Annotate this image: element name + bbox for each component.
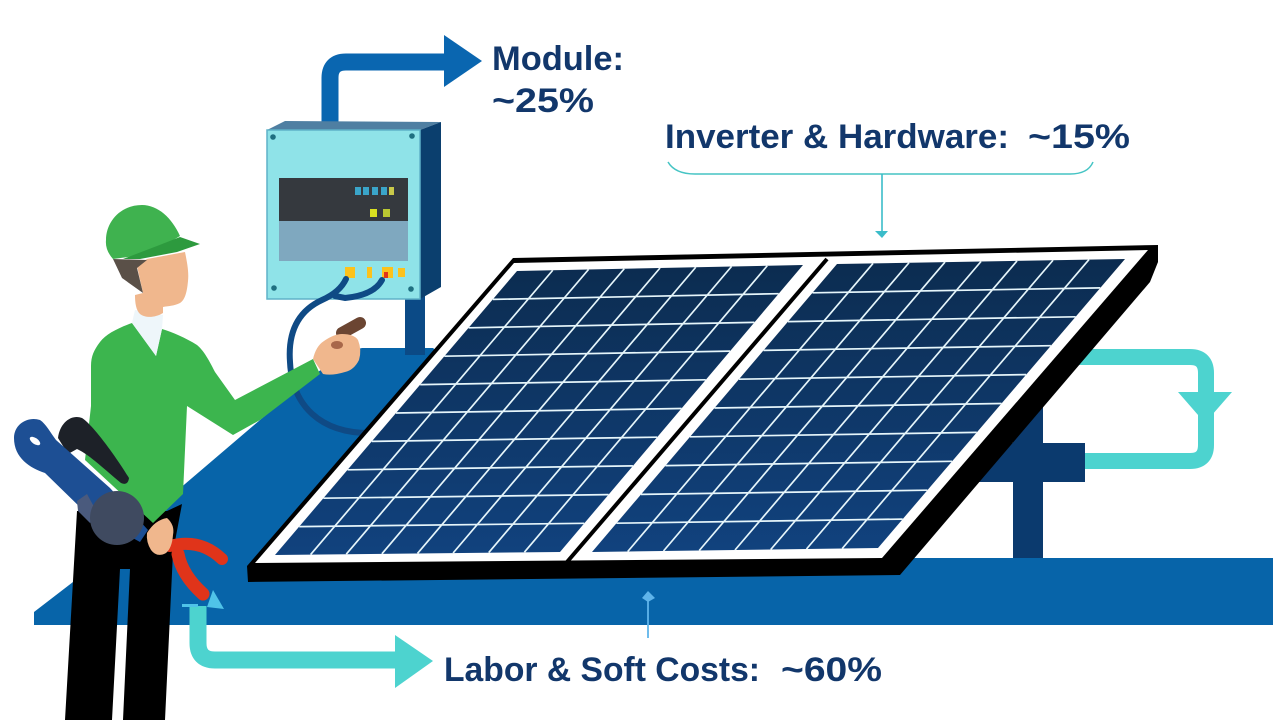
blue arrow to module label bbox=[330, 35, 482, 122]
inverter and hardware label: ~15% bbox=[1028, 118, 1130, 156]
cables bbox=[290, 279, 382, 433]
right module cells bbox=[592, 259, 1125, 552]
shirt bbox=[85, 323, 320, 523]
left module cells bbox=[275, 265, 803, 555]
panel support post bbox=[965, 395, 1085, 558]
inverter and hardware label: Inverter & Hardware: bbox=[665, 118, 1009, 156]
technician bbox=[14, 205, 360, 720]
ground platform bbox=[34, 348, 1273, 625]
right teal loop arrow bbox=[1070, 357, 1232, 461]
labor and soft costs label: ~60% bbox=[781, 651, 882, 689]
collar bbox=[132, 310, 163, 356]
module label: Module: bbox=[492, 40, 624, 78]
black tool bbox=[58, 417, 129, 484]
thin arrow above labor label bbox=[642, 591, 655, 638]
solar panel array bbox=[247, 245, 1158, 582]
labor and soft costs label: Labor & Soft Costs: bbox=[444, 651, 760, 689]
pointing hand bbox=[313, 323, 360, 375]
module label: ~25% bbox=[492, 82, 594, 120]
centre divider bbox=[567, 259, 827, 562]
teal arrow to labor label bbox=[198, 606, 433, 688]
inverter and hardware bracket with arrow bbox=[668, 162, 1093, 238]
lower hand bbox=[147, 518, 173, 555]
hair bbox=[113, 259, 147, 293]
small light blue arrowhead bbox=[182, 590, 224, 609]
inverter box bbox=[267, 121, 441, 355]
hard hat bbox=[106, 205, 200, 259]
tool grip bbox=[77, 491, 144, 545]
panel frame bbox=[247, 245, 1158, 582]
wrench bbox=[14, 419, 148, 542]
module label bbox=[492, 40, 624, 120]
pliers bbox=[170, 544, 222, 594]
trousers bbox=[65, 504, 182, 720]
neck and face bbox=[135, 252, 188, 317]
